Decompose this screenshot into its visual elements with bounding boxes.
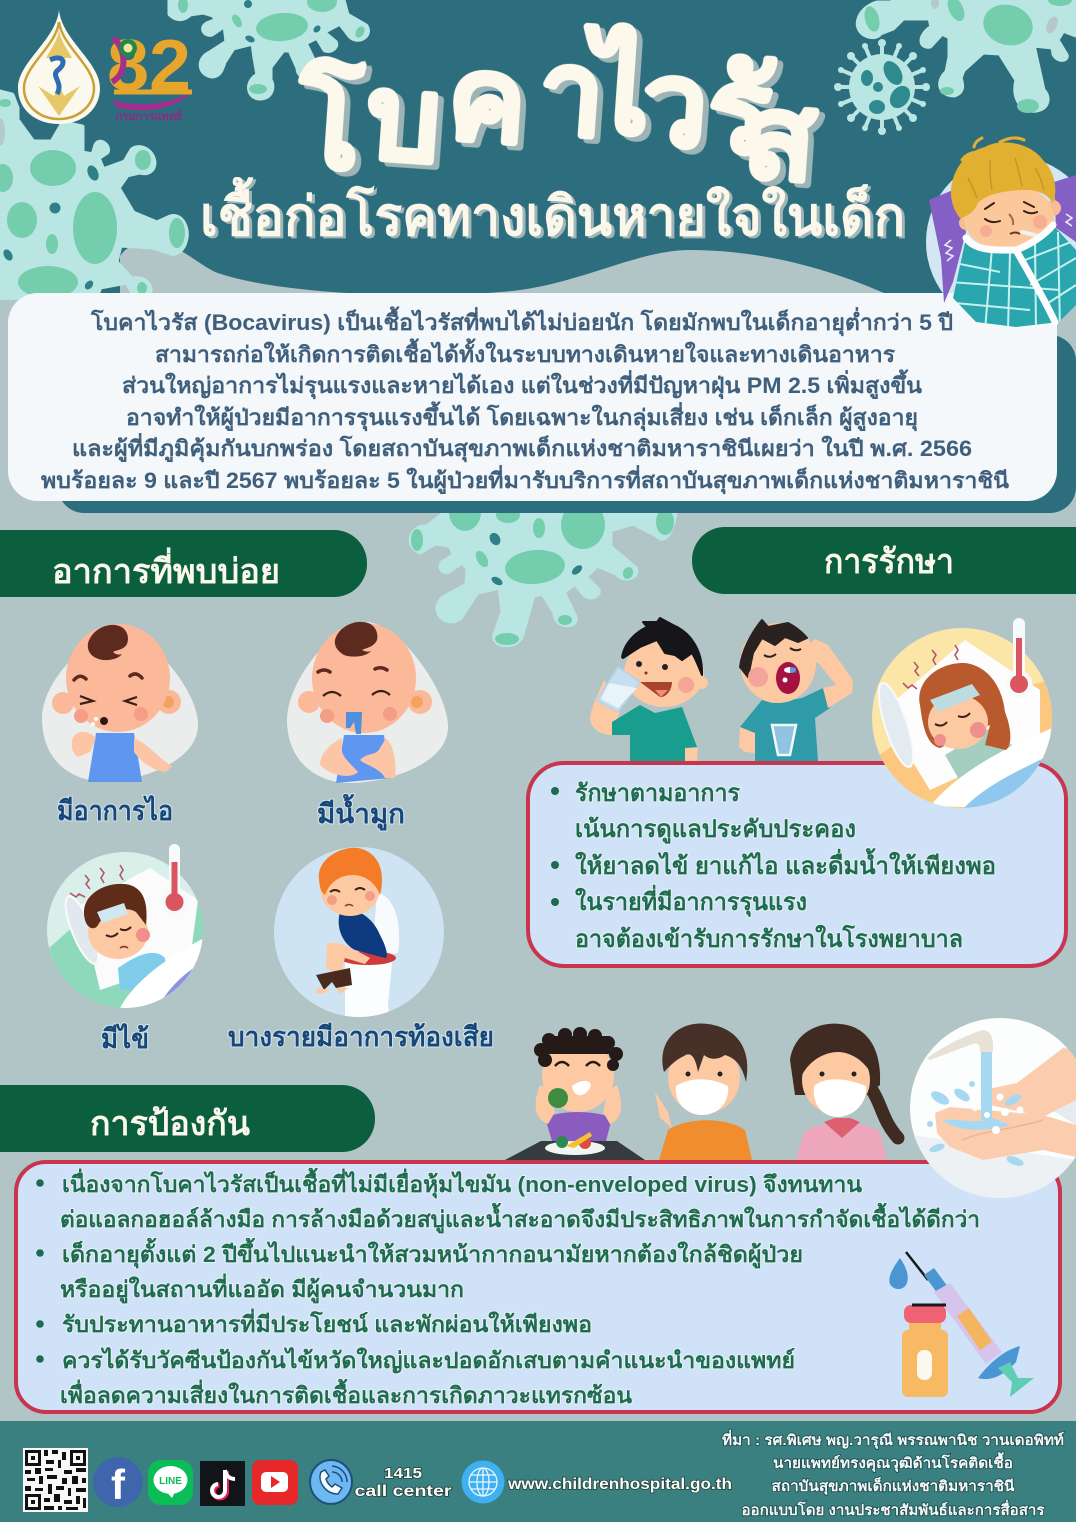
source credits: นายแพทย์ทรงคุณวุฒิด้านโรคติดเชื้อ xyxy=(773,1452,1013,1472)
intro text: สามารถก่อให้เกิดการติดเชื้อได้ทั้งในระบบทางเดินหายใจและทางเดินอาหาร xyxy=(155,338,895,367)
logo: 82 anniversary: กรมการแพทย์ xyxy=(116,110,182,123)
intro text: อาจทำให้ผู้ป่วยมีอาการรุนแรงขึ้นได้ โดยเฉพาะในกลุ่มเสี่ยง เช่น เด็กเล็ก ผู้สูงอายุ xyxy=(126,401,918,432)
icon: sick boy backdrop xyxy=(926,156,1076,328)
logo: institute drop emblem xyxy=(18,10,100,124)
heading: prevention xyxy=(0,1085,375,1152)
icon: QR code xyxy=(23,1448,88,1512)
intro text: ส่วนใหญ่อาการไม่รุนแรงและหายได้เอง แต่ในช่วงที่มีปัญหาฝุ่น PM 2.5 เพิ่มสูงขึ้น xyxy=(122,369,922,400)
website link: www.childrenhospital.go.th xyxy=(507,1476,732,1493)
intro text xyxy=(41,306,1009,495)
intro text: และผู้ที่มีภูมิคุ้มกันบกพร่อง โดยสถาบันสุขภาพเด็กแห่งชาติมหาราชินีเผยว่า ในปี พ.ศ. 2566 xyxy=(72,432,972,463)
icon: hand washing xyxy=(910,1018,1076,1198)
symptom: runny nose baby xyxy=(287,622,448,783)
ears and face xyxy=(959,216,973,230)
prevention list xyxy=(36,1167,980,1408)
label: fever: มีไข้ xyxy=(101,1023,149,1054)
icon: boy taking medicine xyxy=(739,620,853,762)
call center text: 1415 xyxy=(384,1465,422,1482)
icon: sick boy in blanket xyxy=(929,138,1076,330)
treatment list: ให้ยาลดไข้ ยาแก้ไอ และดื่มน้ำให้เพียงพอ xyxy=(575,847,996,880)
symptom: fever boy xyxy=(47,844,210,1015)
prevention list: ควรได้รับวัคซีนป้องกันไข้หวัดใหญ่และปอดอักเสบตามคำแนะนำของแพทย์ xyxy=(62,1347,795,1374)
call center text xyxy=(354,1465,452,1500)
virus: top centre xyxy=(170,0,367,98)
thermometer xyxy=(1022,232,1055,240)
heading: prevention: การป้องกัน xyxy=(90,1105,250,1143)
pillow xyxy=(929,175,1076,303)
virus: left large xyxy=(0,92,186,300)
virus: top right xyxy=(858,0,1076,113)
source credits: ที่มา : รศ.พิเศษ พญ.วารุณี พรรณพานิช วานเดอพิทท์ xyxy=(722,1429,1064,1449)
prevention list: เนื่องจากโบคาไวรัสเป็นเชื้อที่ไม่มีเยื่อหุ้มไขมัน (non-enveloped virus) จึงทนทาน xyxy=(62,1167,863,1199)
treatment list: อาจต้องเข้ารับการรักษาในโรงพยาบาล xyxy=(575,924,963,953)
icon: boy drinking water xyxy=(590,618,708,762)
prevention list: เด็กอายุตั้งแต่ 2 ปีขึ้นไปแนะนำให้สวมหน้ากากอนามัยหากต้องใกล้ชิดผู้ป่วย xyxy=(62,1237,803,1269)
title: รั xyxy=(703,43,777,180)
icon: YouTube xyxy=(252,1460,298,1505)
title: า xyxy=(534,26,609,162)
prevention list: เพื่อลดความเสี่ยงในการติดเชื้อและการเกิดภาวะแทรกซ้อน xyxy=(60,1378,633,1408)
icon: boy eating vegetables xyxy=(505,1027,645,1160)
label: cough: มีอาการไอ xyxy=(57,795,173,826)
hair xyxy=(951,142,1055,218)
subtitle: เชื้อก่อโรคทางเดินหายใจในเด็ก xyxy=(200,177,905,247)
source credits xyxy=(722,1429,1064,1519)
prevention list: หรืออยู่ในสถานที่แออัด มีผู้คนจำนวนมาก xyxy=(60,1273,464,1304)
icon: Facebook xyxy=(93,1457,143,1508)
icon: LINE: LINE xyxy=(159,1476,182,1487)
water xyxy=(981,1052,992,1120)
symptom: cough baby xyxy=(42,624,198,782)
icon: globe xyxy=(462,1460,504,1504)
title: ว xyxy=(637,37,713,173)
treatment list: ในรายที่มีอาการรุนแรง xyxy=(575,884,807,918)
source credits: ออกแบบโดย งานประชาสัมพันธ์และการสื่อสาร xyxy=(742,1499,1045,1519)
icon: boy wearing mask xyxy=(655,1023,752,1160)
logo: 82 anniversary: 82 xyxy=(107,26,191,106)
icon: girl wearing mask xyxy=(790,1024,898,1160)
intro text: พบร้อยละ 9 และปี 2567 พบร้อยละ 5 ในผู้ป่วยที่มารับบริการที่สถาบันสุขภาพเด็กแห่งชาติมหาราชินี xyxy=(41,464,1009,495)
virus: behind intro xyxy=(411,493,675,645)
label: runny nose: มีน้ำมูก xyxy=(317,793,405,831)
icon: TikTok xyxy=(200,1461,245,1506)
symptom: boy on toilet xyxy=(274,847,444,1020)
faucet xyxy=(927,1030,993,1060)
lower hand xyxy=(935,1107,1076,1160)
icon: LINE xyxy=(148,1460,193,1505)
title xyxy=(292,2,823,227)
heading: treatment: การรักษา xyxy=(824,543,954,581)
heading: treatment xyxy=(692,527,1076,594)
title: ไ xyxy=(575,22,655,160)
title: บ xyxy=(362,51,446,188)
upper hand xyxy=(980,1048,1076,1117)
call center text: call center xyxy=(354,1483,452,1500)
thermometer xyxy=(162,844,188,915)
heading: symptoms xyxy=(0,530,367,597)
virus: small dark xyxy=(834,39,930,135)
icon: girl with fever xyxy=(872,618,1060,810)
title: ค xyxy=(443,31,531,169)
footer band xyxy=(0,1421,1076,1522)
label: diarrhea: บางรายมีอาการท้องเสีย xyxy=(228,1022,494,1052)
header band xyxy=(0,0,1076,300)
prevention list: ต่อแอลกอฮอล์ล้างมือ การล้างมือด้วยสบู่และน้ำสะอาดจึงมีประสิทธิภาพในการกำจัดเชื้อได้ดีกว่า xyxy=(60,1202,980,1234)
source credits: สถาบันสุขภาพเด็กแห่งชาติมหาราชินี xyxy=(772,1476,1015,1495)
panel: intro xyxy=(8,293,1076,513)
thermometer xyxy=(1006,618,1032,698)
treatment list xyxy=(551,780,996,953)
icon: phone call xyxy=(310,1460,352,1504)
icon: Facebook: f xyxy=(111,1461,126,1508)
title: โ xyxy=(292,56,366,195)
treatment list: รักษาตามอาการ xyxy=(575,780,740,807)
intro text: โบคาไวรัส (Bocavirus) เป็นเชื้อไวรัสที่พบได้ไม่บ่อยนัก โดยมักพบในเด็กอายุต่ำกว่า 5 ปี xyxy=(90,306,953,337)
panel: treatment xyxy=(528,763,1066,966)
blanket xyxy=(953,228,1076,327)
title: ส xyxy=(739,70,820,207)
icon: vaccine syringe and vial xyxy=(889,1252,1034,1397)
prevention list: รับประทานอาหารที่มีประโยชน์ และพักผ่อนให้เพียงพอ xyxy=(62,1308,592,1337)
treatment list: เน้นการดูแลประคับประคอง xyxy=(575,816,856,844)
heading: symptoms: อาการที่พบบ่อย xyxy=(52,547,280,591)
foam and drops xyxy=(972,1094,1024,1134)
panel: prevention xyxy=(16,1162,1060,1412)
